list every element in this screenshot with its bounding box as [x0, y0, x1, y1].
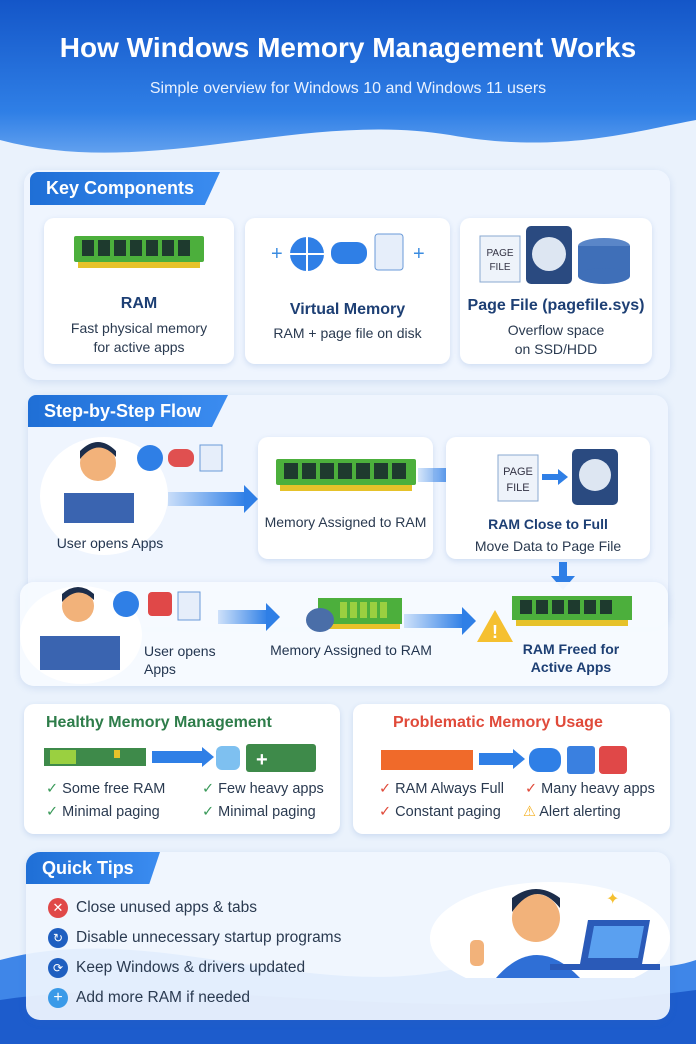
icon: user with laptop: [64, 442, 134, 523]
icon: page file and disk: PAGE: [486, 248, 514, 259]
tip list: [48, 898, 341, 1008]
panel: problematic memory usage: Problematic Memory Usage: [393, 714, 603, 731]
tab: step-by-step flow: Step-by-Step Flow: [44, 401, 201, 421]
icon: warning: [477, 610, 513, 642]
title: How Windows Memory Management Works: [60, 32, 636, 63]
step: user opens apps: User opens: [144, 643, 216, 659]
tip list: Disable unnecessary startup programs: [76, 929, 341, 946]
card: RAM: RAM: [121, 295, 157, 312]
icon: page file and disk: [480, 226, 630, 284]
card: virtual memory: RAM + page file on disk: [273, 325, 422, 341]
card: memory assigned to RAM: Memory Assigned to RAM: [265, 514, 426, 530]
card: RAM: Fast physical memory: [71, 320, 207, 336]
step: memory assigned: [270, 598, 432, 658]
card: RAM close to full: [446, 437, 650, 559]
tab: key components: [30, 172, 220, 205]
panel: flow row 2: [20, 582, 668, 686]
arrow: [404, 614, 464, 628]
card: page file: [460, 218, 652, 364]
icon: apps: [270, 234, 424, 271]
step 1: user opens apps: [40, 437, 222, 555]
icon: problem flow: [381, 746, 627, 774]
tab: quick tips: [26, 852, 160, 884]
card: RAM close to full: Move Data to Page File: [475, 538, 621, 554]
tab: key components: Key Components: [46, 178, 194, 198]
panel: healthy memory management: ✓ Minimal paging: [202, 804, 316, 820]
panel: healthy memory management: ✓ Minimal paging: [46, 804, 160, 820]
card: virtual memory: Virtual Memory: [290, 301, 405, 318]
step: RAM freed: Active Apps: [531, 659, 611, 675]
step: memory assigned: Memory Assigned to RAM: [270, 642, 432, 658]
header background: [0, 0, 696, 160]
icon: healthy flow: +: [256, 749, 268, 771]
panel: healthy memory management: [24, 704, 340, 834]
card: virtual memory: [245, 218, 450, 364]
panel: problematic memory usage: [353, 704, 670, 834]
tip list: +: [53, 989, 63, 1006]
icon: page file to disk: FILE: [506, 482, 530, 494]
icon: RAM: [74, 236, 204, 268]
arrow: [418, 468, 458, 482]
arrow down: [551, 562, 575, 582]
tip list: Keep Windows & drivers updated: [76, 959, 305, 976]
illustration: happy user with laptop: [430, 882, 670, 978]
card: page file: Page File (pagefile.sys): [468, 297, 644, 314]
step: RAM freed: RAM Freed for: [523, 641, 619, 657]
panel: quick tips: [26, 852, 670, 1020]
subtitle: Simple overview for Windows 10 and Windows 11 users: [150, 80, 546, 97]
icon: healthy flow: [44, 744, 316, 772]
bottom wave: [0, 948, 696, 1044]
panel: problematic memory usage: ⚠ Alert alerting: [523, 804, 621, 820]
panel: healthy memory management: ✓ Some free RAM: [46, 781, 165, 797]
icon: apps: +: [412, 243, 424, 265]
icon: page file and disk: FILE: [489, 262, 511, 273]
tip list: Close unused apps & tabs: [76, 899, 257, 916]
icons: apps: [137, 444, 222, 472]
icon: warning: !: [492, 622, 498, 642]
arrow: [218, 610, 268, 624]
panel: key components: [24, 170, 670, 380]
icon: page file to disk: PAGE: [503, 466, 533, 478]
illustration: happy user with laptop: ✦: [606, 891, 619, 908]
icon: page file to disk: [498, 449, 618, 505]
panel: healthy memory management: ✓ Few heavy apps: [202, 781, 324, 797]
card: memory assigned to RAM: [258, 437, 433, 559]
tab: step-by-step flow: [28, 395, 228, 427]
tip list: ↻: [53, 931, 63, 945]
panel: problematic memory usage: ✓ Constant paging: [379, 804, 501, 820]
card: RAM close to full: RAM Close to Full: [488, 516, 608, 532]
card: RAM: [44, 218, 234, 364]
card: RAM: for active apps: [93, 339, 185, 355]
panel: healthy memory management: Healthy Memory Management: [46, 714, 272, 731]
card: page file: Overflow space: [508, 322, 604, 338]
card: page file: on SSD/HDD: [515, 341, 597, 357]
step: user opens apps: Apps: [144, 661, 176, 677]
step: user opens apps: [20, 586, 216, 684]
step: RAM freed: [512, 596, 632, 675]
panel: problematic memory usage: ✓ Many heavy apps: [525, 781, 655, 797]
tip list: Add more RAM if needed: [76, 989, 250, 1006]
panel: step-by-step flow: [28, 395, 668, 627]
icon: apps: +: [270, 243, 282, 265]
panel: problematic memory usage: ✓ RAM Always Full: [379, 781, 504, 797]
tip list: ⟳: [53, 961, 63, 975]
tab: quick tips: Quick Tips: [42, 858, 134, 878]
arrow: [168, 492, 246, 506]
tip list: ✕: [53, 900, 63, 915]
step 1: user opens apps: User opens Apps: [57, 535, 163, 551]
